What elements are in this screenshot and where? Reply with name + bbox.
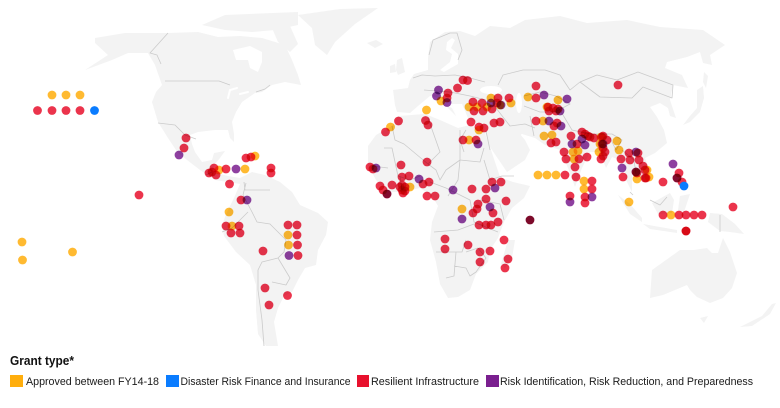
legend item: disaster risk finance: Disaster Risk Finance and Insurance (180, 376, 350, 388)
dot: dark overlap off Tanzania (526, 216, 534, 224)
dots: resilient infrastructure (33, 76, 737, 309)
data points on map (18, 76, 737, 309)
dots: approved between FY14-18 (18, 91, 675, 264)
country borders (150, 33, 720, 346)
legend item: resilient infrastructure: Resilient Infrastructure (371, 376, 479, 388)
world map land (85, 8, 776, 346)
dots: risk identification, risk reduction, and preparedness (175, 86, 681, 260)
dots: disaster risk finance and insurance (90, 106, 688, 190)
seas and lakes (228, 38, 528, 142)
legend (10, 354, 753, 388)
legend item: approved: Approved between FY14-18 (26, 376, 159, 388)
legend title: Grant type* (10, 354, 74, 368)
legend item: risk identification: Risk Identification, Risk Reduction, and Preparedness (500, 376, 753, 388)
